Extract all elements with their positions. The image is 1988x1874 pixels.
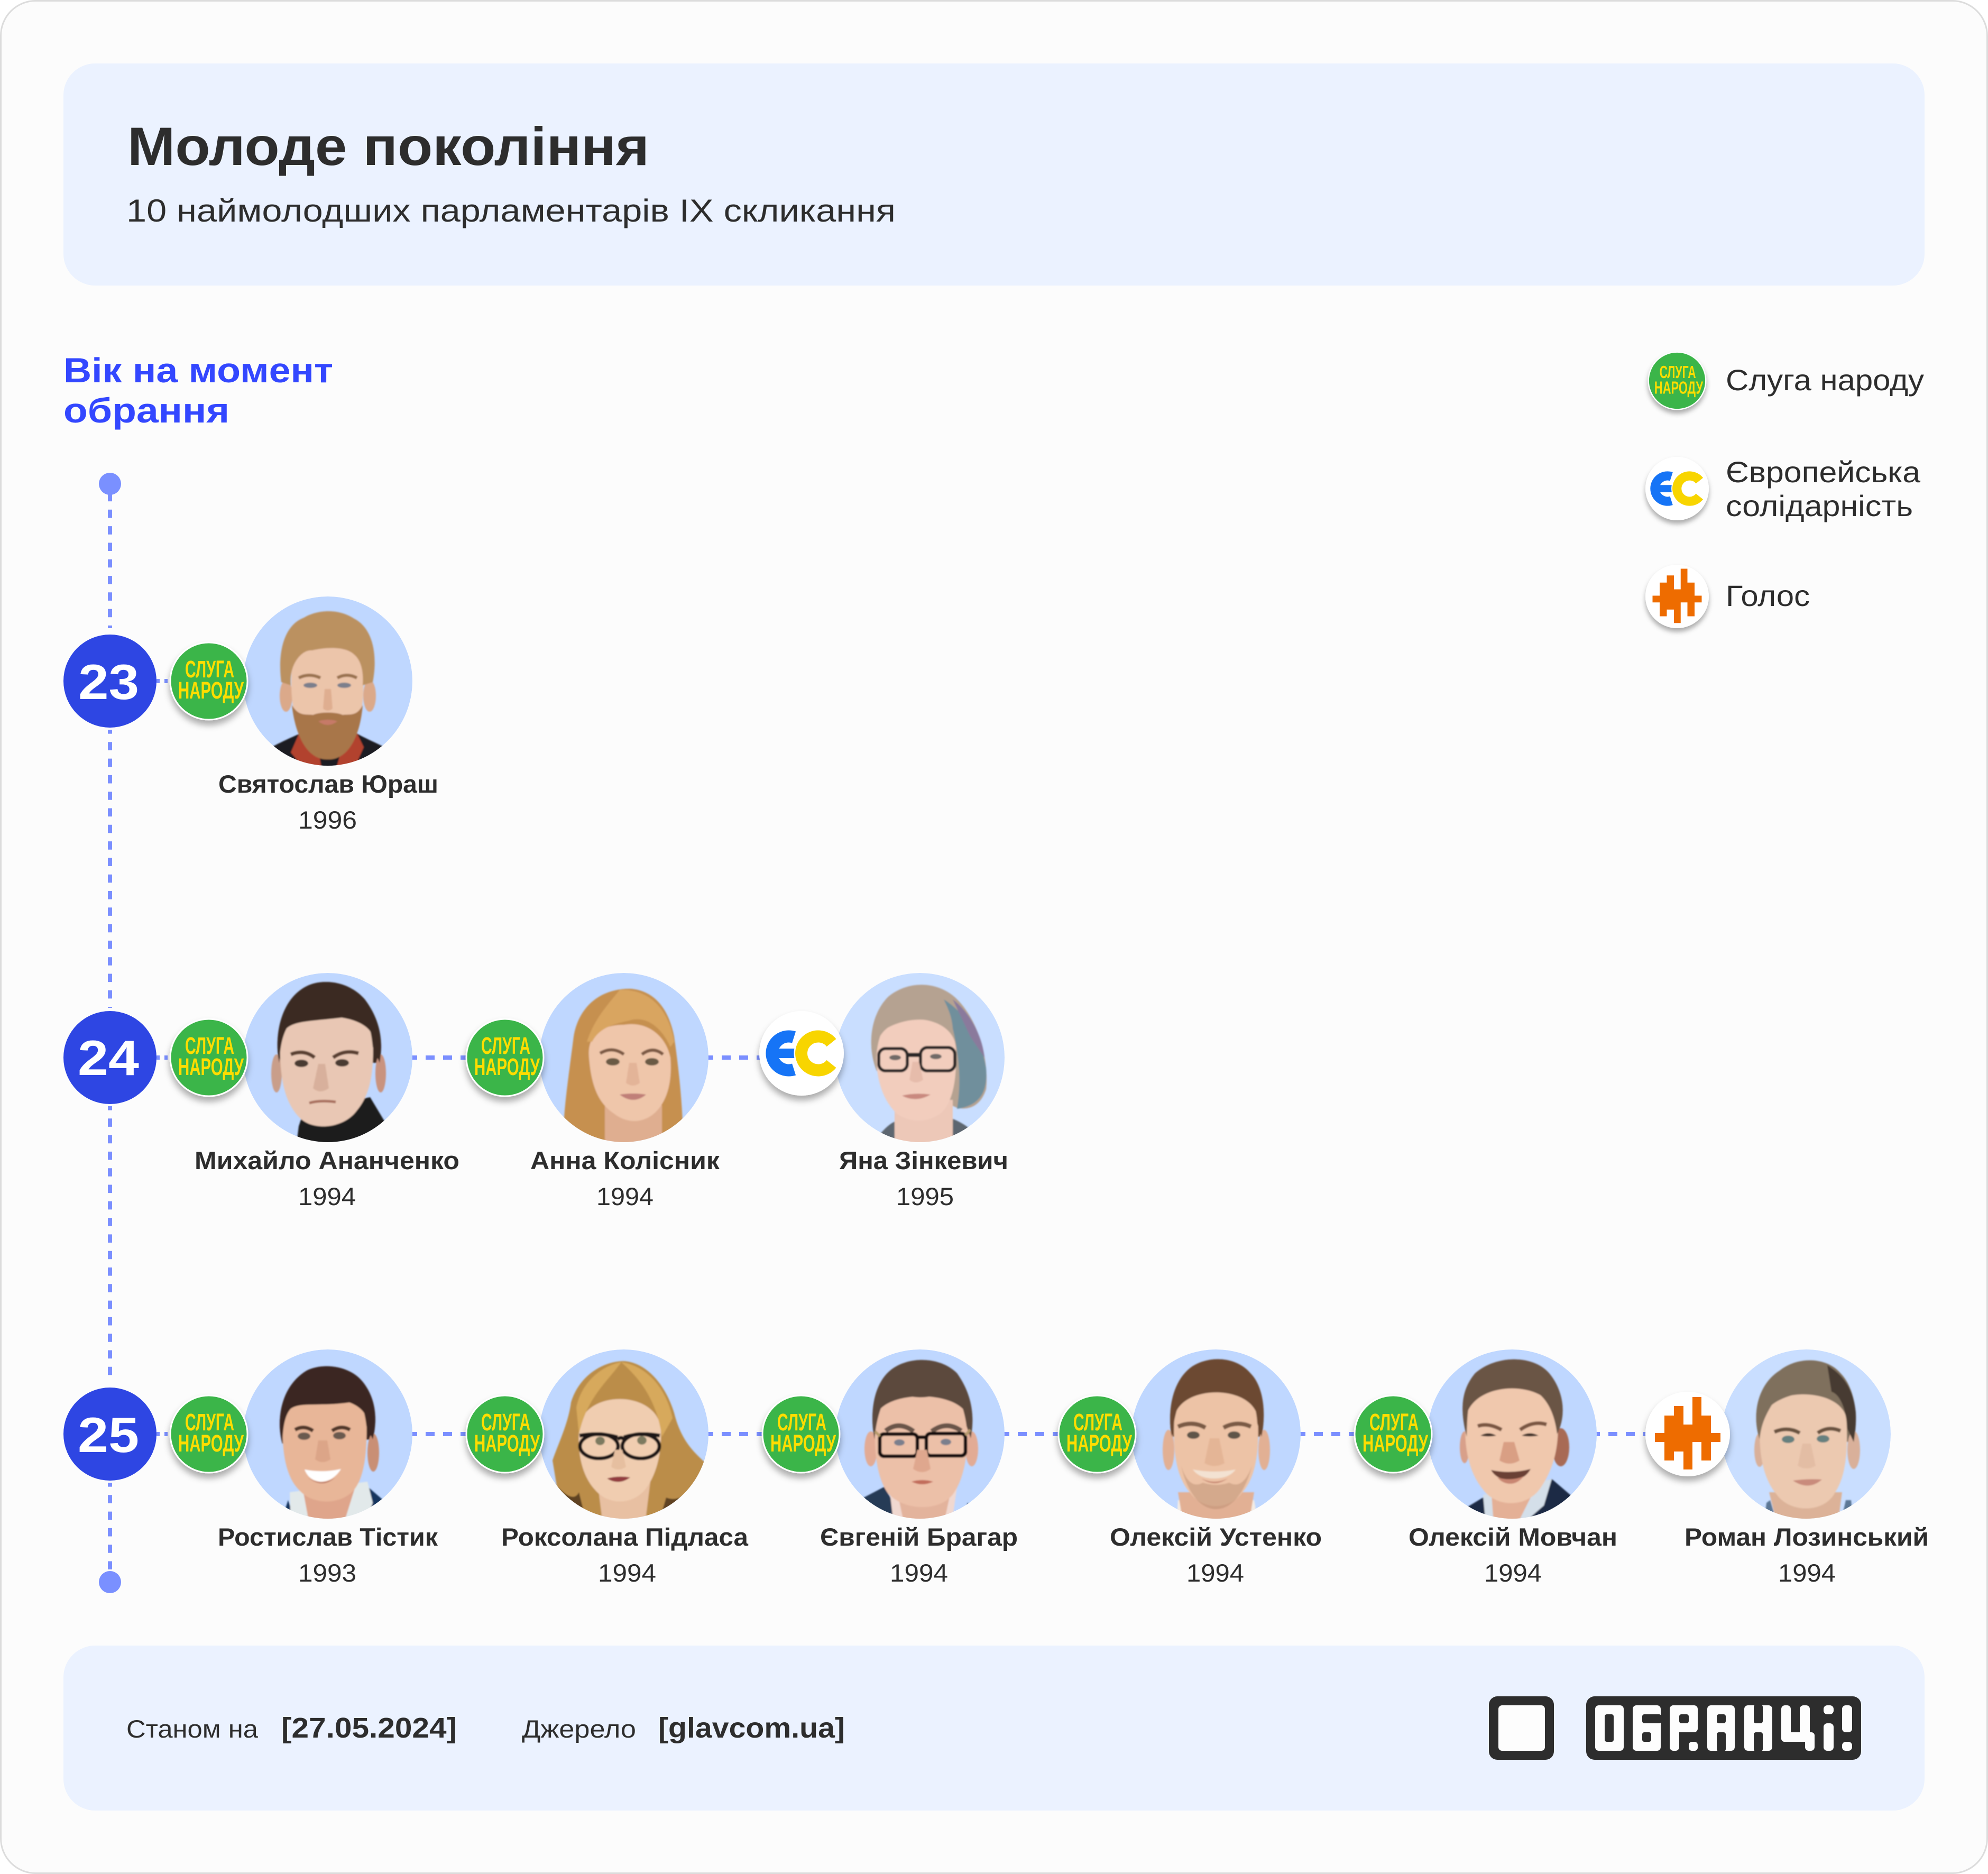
party badge: Слуга народу: СЛУГА [481,1409,530,1436]
party badge: Слуга народу: НАРОДУ [1066,1430,1133,1457]
date label: Станом на [126,1715,259,1743]
name: Анна Колісник [530,1146,720,1174]
party badge: Слуга народу [170,642,247,720]
party badge: Слуга народу: СЛУГА [1073,1409,1122,1436]
party badge: Слуга народу: НАРОДУ [178,1053,244,1080]
name: Яна Зінкевич [839,1146,1008,1174]
name: Олексій Мовчан [1409,1523,1617,1551]
birth year: 1995 [896,1182,954,1210]
panel: header [63,63,1925,286]
party badge: Слуга народу [466,1395,544,1473]
panel: footer [63,1646,1925,1811]
party badge: Слуга народу [170,1019,247,1096]
name: Олексій Устенко [1110,1523,1322,1551]
birth year: 1994 [890,1559,948,1587]
party badge: Слуга народу: НАРОДУ [1363,1430,1429,1457]
axis heading: обрання [63,391,229,430]
title: Молоде покоління [127,116,649,177]
legend [1645,352,1924,628]
age 25 [63,1388,157,1481]
party badge: Слуга народу [170,1395,247,1473]
axis heading: Вік на момент [63,351,333,390]
party badge: Слуга народу: СЛУГА [481,1032,530,1059]
source value: [glavcom.ua] [658,1712,845,1744]
birth year: 1994 [596,1182,654,1210]
party badge: Слуга народу: СЛУГА [185,1409,234,1436]
birth year: 1994 [598,1559,656,1587]
birth year: 1994 [1186,1559,1244,1587]
name: Михайло Ананченко [195,1146,459,1174]
age 23: 23 [78,654,139,710]
legend icon: Слуга народу: НАРОДУ [1654,379,1704,398]
photo: Тістик [243,1349,412,1524]
party badge: Слуга народу: НАРОДУ [474,1430,540,1457]
name: Євгеній Брагар [820,1523,1018,1551]
party badge: Слуга народу [1355,1395,1432,1473]
party badge: Слуга народу: НАРОДУ [178,1430,244,1457]
legend label: Європейська солідарність: Європейська [1726,455,1921,489]
legend label: Голос: Голос [1726,579,1810,612]
legend icon: Голос [1645,565,1709,628]
name: Ростислав Тістик [218,1523,438,1551]
photo: Лозинський [1722,1349,1891,1524]
party badge: Голос [1645,1392,1730,1476]
birth year: 1994 [1778,1559,1836,1587]
birth year: 1996 [298,806,357,834]
party badge: Слуга народу: СЛУГА [185,656,234,683]
person: Роман Лозинський [1645,1349,1929,1587]
age 24 [63,1011,157,1104]
photo: Зінкевич [835,973,1005,1147]
party badge: Слуга народу: НАРОДУ [474,1053,540,1080]
person: Олексій Устенко [1059,1349,1322,1587]
age 25: 25 [78,1407,139,1463]
legend icon: Європейська солідарність [1645,457,1709,520]
photo: Колісник [539,973,708,1147]
person: Роксолана Підласа [466,1349,749,1587]
person: Олексій Мовчан [1355,1349,1617,1587]
birth year: 1994 [298,1182,356,1210]
party badge: Слуга народу [1059,1395,1136,1473]
legend icon: Слуга народу: СЛУГА [1660,363,1696,382]
person: Михайло Ананченко [170,973,459,1210]
row connectors [157,681,1648,1434]
age 24: 24 [78,1030,139,1086]
party badge: Слуга народу [466,1019,544,1096]
party badge: Слуга народу [762,1395,840,1473]
party badge: Слуга народу: СЛУГА [1369,1409,1419,1436]
age 23 [63,635,157,728]
party badge: Слуга народу: НАРОДУ [770,1430,836,1457]
photo: Підласа [539,1349,708,1524]
party badge: Європейська солідарність [759,1011,844,1096]
photo: Устенко [1131,1349,1301,1524]
person: Ростислав Тістик [170,1349,438,1587]
legend label: Європейська солідарність: солідарність [1726,489,1913,522]
name: Роксолана Підласа [501,1523,749,1551]
photo: Брагар [835,1349,1005,1524]
person: Анна Колісник [466,973,720,1210]
person: Яна Зінкевич [759,973,1008,1210]
logo: square mark [1489,1696,1554,1760]
timeline axis [99,473,121,1593]
person: Святослав Юраш [170,596,438,834]
legend label: Слуга народу: Слуга народу [1726,363,1924,397]
birth year: 1993 [298,1559,356,1587]
person: Євгеній Брагар [762,1349,1018,1587]
name: Роман Лозинський [1685,1523,1929,1551]
source label: Джерело [522,1715,636,1743]
photo: Юраш [243,596,412,771]
date value: [27.05.2024] [281,1712,457,1744]
legend icon: Слуга народу [1649,352,1706,409]
photo: Ананченко [243,973,412,1147]
party badge: Слуга народу: НАРОДУ [178,677,244,704]
party badge: Слуга народу: СЛУГА [185,1032,234,1059]
name: Святослав Юраш [218,770,438,798]
logo: Обранці wordmark [1586,1696,1861,1760]
subtitle: 10 наймолодших парламентарів IX скликання [126,193,896,228]
birth year: 1994 [1484,1559,1542,1587]
party badge: Слуга народу: СЛУГА [777,1409,826,1436]
photo: Мовчан [1428,1349,1597,1524]
